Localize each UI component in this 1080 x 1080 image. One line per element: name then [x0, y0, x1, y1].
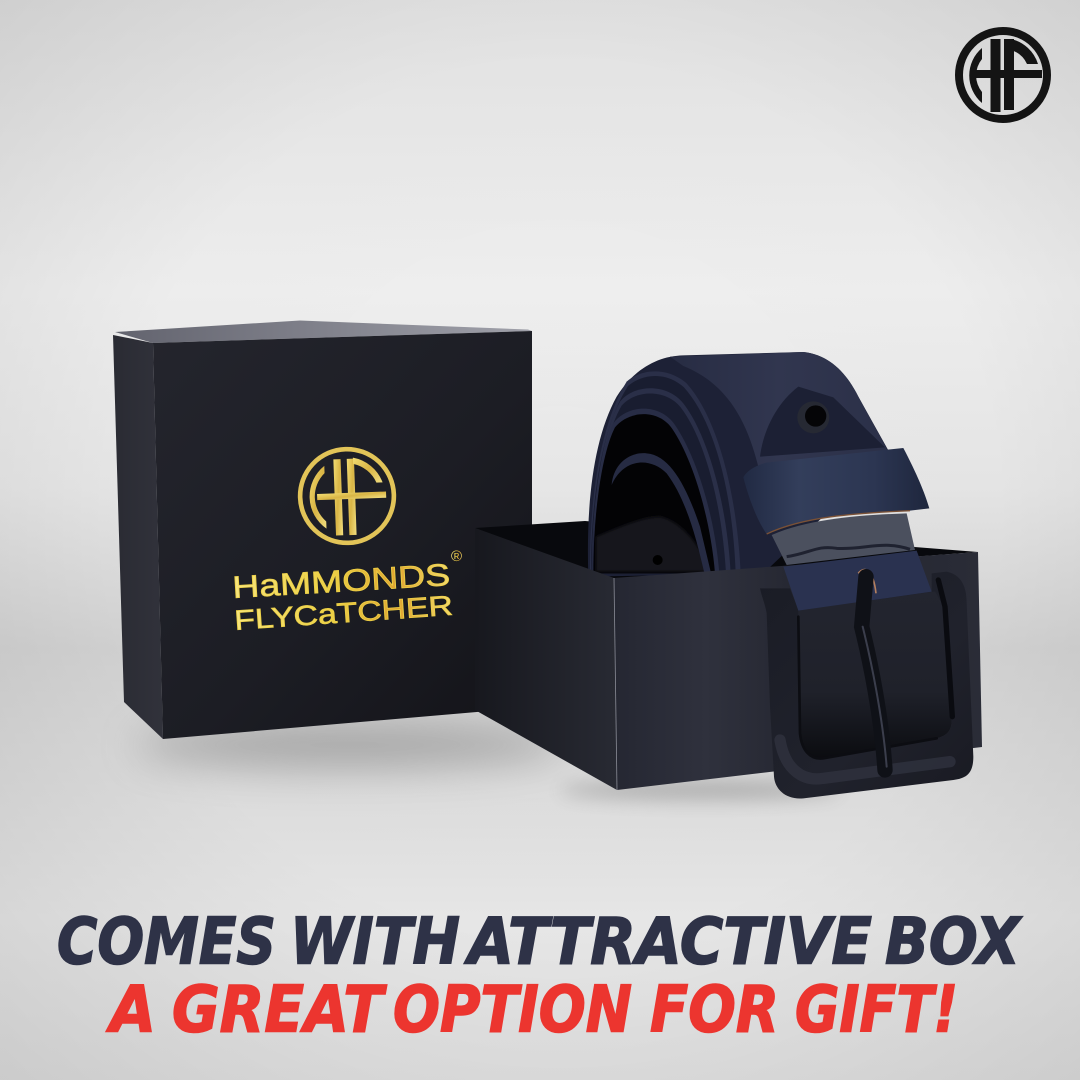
belt buckle assembly	[743, 448, 973, 799]
headline line 2: FOR	[650, 974, 779, 1048]
box right outer face	[614, 552, 982, 790]
brand wordmark: ®	[451, 548, 462, 565]
lid box with brand print	[113, 320, 532, 739]
grey strap section	[772, 513, 915, 565]
buckle highlights	[780, 580, 952, 779]
coil silhouette	[588, 352, 890, 577]
brand wordmark	[231, 548, 462, 636]
headline line 2: GREAT	[172, 974, 387, 1048]
belt main strap	[670, 352, 888, 467]
box front face	[153, 331, 532, 739]
headline line 1: WITH	[290, 906, 460, 980]
keeper loop	[743, 448, 929, 534]
gold logo on box	[299, 448, 395, 544]
belt free end	[612, 453, 711, 572]
floor shadow	[135, 723, 840, 800]
headline line 1	[57, 906, 1022, 980]
belt hole	[653, 555, 663, 565]
headline line 2: A	[105, 974, 156, 1048]
headline line 1: ATTRACTIVE	[463, 906, 872, 980]
headline line 1: COMES	[57, 906, 276, 980]
box left outer face	[475, 528, 617, 790]
buckle pin	[862, 577, 885, 770]
navy strap section	[783, 551, 932, 611]
headline line 2: GIFT!	[795, 974, 958, 1048]
headline line 1: BOX	[885, 906, 1022, 980]
logo: HF monogram, top right	[959, 31, 1047, 119]
headline line 2	[105, 974, 958, 1048]
box top face	[115, 320, 532, 343]
headline line 2: OPTION	[393, 974, 632, 1048]
rivet tab	[760, 387, 885, 457]
box left face	[113, 335, 163, 739]
buckle hole shade	[798, 592, 952, 759]
coil inner lining	[596, 517, 707, 572]
open box interior	[475, 521, 978, 579]
buckle frame	[760, 572, 973, 799]
open box outer faces	[475, 528, 982, 790]
rivet	[797, 401, 829, 433]
belt coil	[588, 352, 890, 577]
brand wordmark: HaMMONDS	[231, 557, 451, 605]
coil rings	[590, 371, 741, 573]
brand wordmark: FLYCaTCHER	[233, 590, 454, 636]
